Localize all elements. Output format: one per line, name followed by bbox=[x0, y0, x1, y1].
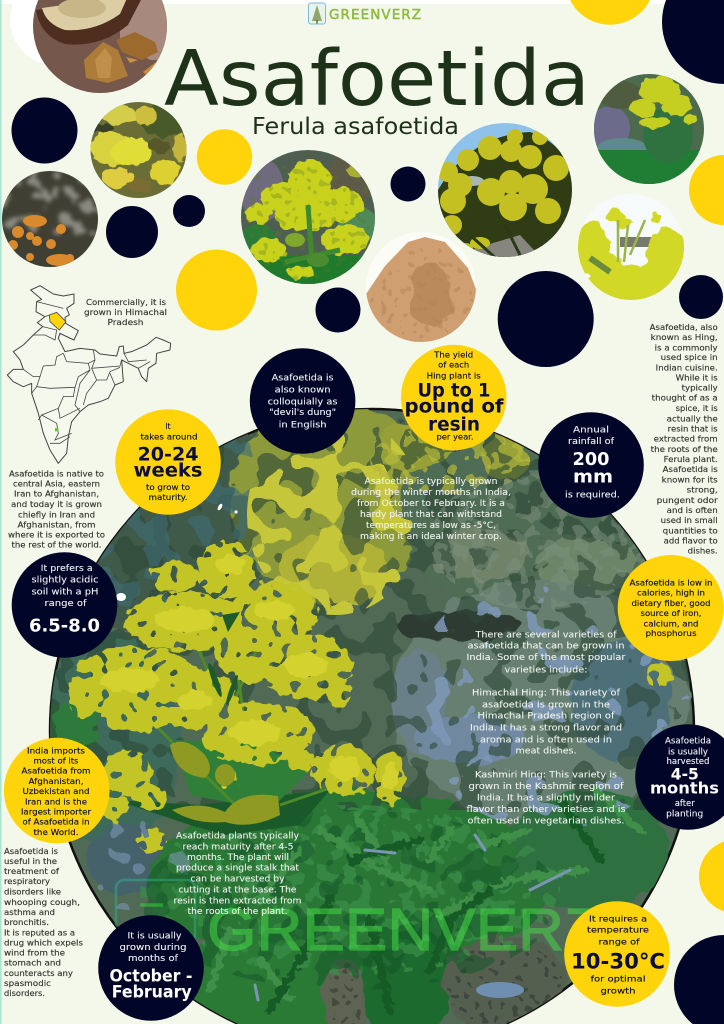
text: native range: Asafoetida is native to bbox=[9, 470, 104, 479]
callout: growing months bbox=[98, 915, 204, 1021]
callout: devil's dung: Asafoetida is bbox=[272, 374, 334, 384]
text: medicinal uses: It is reputed as a bbox=[4, 928, 75, 937]
text: varieties: India. It has a strong flavor and bbox=[470, 723, 622, 733]
text: varieties: asafoetida is grown in the bbox=[482, 700, 610, 710]
text: description, right column: extracted from bbox=[654, 435, 718, 444]
text: varieties: aroma and is often used in bbox=[480, 735, 612, 745]
text: varieties: India. It has a slightly milder bbox=[477, 794, 615, 804]
photo: flowering ferula plant bbox=[240, 150, 378, 290]
callout: devil's dung: "devil's dung" bbox=[269, 408, 336, 418]
callout: imports: Iran and is the bbox=[25, 797, 87, 806]
callout: nutrition: phosphorus bbox=[646, 629, 696, 638]
text: description, right column: spice, it is bbox=[676, 404, 718, 413]
text: varieties: varieties include: bbox=[504, 666, 588, 676]
background foliage texture bbox=[20, 390, 690, 1024]
small white speckles bbox=[116, 503, 238, 601]
callout: imports bbox=[4, 738, 110, 843]
text: medicinal uses: Asafoetida is bbox=[4, 847, 58, 856]
callout: temperature: It requires a bbox=[589, 914, 647, 923]
text: maturity and harvest: can be harvested by bbox=[190, 875, 285, 885]
text: medicinal uses: whooping cough, bbox=[4, 898, 80, 907]
callout: temperature bbox=[564, 901, 670, 1007]
callout: imports: India imports bbox=[27, 747, 85, 756]
yellow flower umbels bbox=[68, 542, 674, 853]
title: Asafoetida bbox=[164, 35, 590, 124]
text: varieties: meat dishes. bbox=[516, 747, 576, 757]
Himachal Pradesh highlight bbox=[49, 312, 66, 330]
text: winter growing season: Asafoetida is typically grown bbox=[364, 477, 498, 487]
photo: round yellow flower heads against sky bbox=[436, 120, 576, 262]
text: native range: Afghanistan, from bbox=[18, 520, 96, 529]
text: medicinal uses: wind from the bbox=[4, 949, 65, 958]
text: grown in Himachal Pradesh: Commercially, it is bbox=[86, 298, 166, 307]
callout: yield: per year. bbox=[436, 432, 474, 441]
text: description, right column: used spice in bbox=[661, 353, 718, 362]
photo: powdered asafoetida bbox=[366, 232, 476, 342]
callout: harvest time: planting bbox=[666, 810, 703, 820]
callout: temperature: for optimal bbox=[590, 975, 646, 984]
text: maturity and harvest: months. The plant will bbox=[187, 853, 289, 863]
text: varieties: India. Some of the most popular bbox=[466, 653, 626, 663]
subtitle: Ferula asafoetida bbox=[252, 112, 459, 140]
callout: harvest time: is usually bbox=[668, 747, 708, 757]
text: description, right column: actually the bbox=[667, 414, 718, 423]
text: maturity and harvest: produce a single stalk that bbox=[176, 864, 299, 874]
callout: temperature: growth bbox=[600, 986, 636, 995]
callout: yield bbox=[401, 345, 507, 450]
text: grown in Himachal Pradesh: Pradesh bbox=[108, 318, 144, 327]
text: varieties: grown in the Kashmir region of bbox=[468, 782, 624, 792]
callout: devil's dung: also known bbox=[275, 386, 331, 396]
India map bbox=[7, 286, 171, 463]
callout: imports: largest importer bbox=[21, 808, 92, 817]
callout: temperature: range of bbox=[598, 937, 640, 946]
callout: growing months: It is usually bbox=[128, 931, 182, 941]
text: varieties: asafoetida that can be grown in bbox=[468, 642, 624, 652]
text: winter growing season: hardy plant that can withstand bbox=[360, 510, 502, 520]
callout: yield: of each bbox=[438, 361, 469, 370]
callout: annual rainfall: mm bbox=[573, 466, 613, 487]
photo: orange flowers bbox=[0, 170, 100, 270]
text: maturity and harvest: the roots of the plant. bbox=[188, 907, 288, 917]
callout: imports: of Asafoetida in bbox=[22, 818, 90, 827]
blue-grey leaf strokes bbox=[255, 835, 570, 1000]
callout: imports: Uzbekistan and bbox=[22, 787, 90, 796]
text: description, right column: the roots of the bbox=[651, 445, 718, 454]
text: description, right column: and is often bbox=[667, 506, 718, 515]
text: description, right column: Indian cuisine. bbox=[656, 363, 718, 372]
callout: soil pH bbox=[12, 552, 117, 658]
text: description, right column: While it is bbox=[676, 373, 718, 382]
watermark logo bbox=[114, 878, 591, 952]
callout: harvest time: months bbox=[650, 778, 719, 797]
callout: nutrition: calcium, and bbox=[644, 619, 698, 628]
callout: soil pH: 6.5-8.0 bbox=[29, 616, 100, 637]
callout: yield: Up to 1 bbox=[418, 380, 490, 402]
callout: 20-24 weeks bbox=[115, 409, 221, 515]
callout: growing months: grown during bbox=[120, 943, 186, 953]
callout: yield: The yield bbox=[433, 351, 473, 360]
large circular illustration bbox=[20, 390, 694, 1024]
text: description, right column: Ferula plant. bbox=[664, 455, 718, 464]
logo bbox=[308, 3, 421, 24]
callout: nutrition: calories, high in bbox=[637, 589, 705, 598]
text: description, right column: pungent odor bbox=[657, 496, 719, 505]
callout: harvest time: Asafoetida bbox=[665, 737, 711, 747]
text: maturity and harvest: Asafoetida plants typically bbox=[176, 831, 300, 841]
callout: soil pH: soil with a pH bbox=[32, 587, 98, 597]
text: varieties: Himachal Pradesh region of bbox=[478, 712, 615, 722]
callout: imports: the World. bbox=[34, 828, 78, 837]
text: native range: where it is exported to bbox=[8, 531, 105, 540]
text: description, right column: add flavor to bbox=[664, 536, 718, 545]
text: medicinal uses: respiratory bbox=[4, 877, 50, 886]
callout: growing months: months of bbox=[128, 954, 179, 964]
callout: nutrition: dietary fiber, good bbox=[632, 599, 710, 608]
text: medicinal uses bbox=[4, 847, 83, 998]
text: medicinal uses: treatment of bbox=[4, 867, 59, 876]
text: native range: Iran to Afghanistan, bbox=[14, 490, 99, 499]
text: native range: and today it is grown bbox=[11, 500, 102, 509]
callout: imports: most of its bbox=[34, 757, 78, 766]
text: description, right column: typically bbox=[682, 384, 718, 393]
text: native range: the rest of the world. bbox=[12, 541, 102, 550]
text: description, right column: resin that is bbox=[668, 425, 718, 434]
text: varieties bbox=[466, 631, 626, 827]
text: medicinal uses: useful in the bbox=[4, 857, 57, 866]
text: medicinal uses: spasmodic bbox=[4, 979, 51, 988]
callout: imports: Afghanistan, bbox=[28, 777, 84, 786]
text: varieties: often used in vegetarian dishes. bbox=[468, 817, 624, 827]
text: description, right column: is a commonly bbox=[655, 343, 718, 352]
text: maturity and harvest: reach maturity after 4-5 bbox=[182, 842, 294, 852]
text: medicinal uses: disorders like bbox=[4, 887, 61, 896]
fern leaves and grass bbox=[210, 790, 640, 1010]
text: grown in Himachal Pradesh bbox=[84, 298, 167, 327]
callout: imports: Asafoetida from bbox=[22, 767, 91, 776]
text: description, right column: strong, bbox=[687, 486, 718, 495]
text: medicinal uses: counteracts any bbox=[4, 969, 73, 978]
callout: yield: pound of bbox=[404, 395, 504, 417]
photo: asafoetida powder bowl and resin bbox=[10, 0, 170, 95]
text: description, right column: Asafoetida is bbox=[663, 465, 718, 474]
text: description, right column: known as Hing, bbox=[651, 333, 718, 342]
callout: 20-24 weeks: 20-24 bbox=[138, 443, 198, 465]
callout: devil's dung bbox=[250, 348, 355, 454]
text: description, right column: thought of as a bbox=[652, 394, 718, 403]
callout: soil pH: range of bbox=[44, 599, 88, 609]
photo: yellow umbels against pale sky bbox=[578, 194, 684, 300]
text: varieties: Kashmiri Hing: This variety is bbox=[475, 770, 617, 780]
callout: annual rainfall: is required. bbox=[565, 491, 620, 501]
callout: annual rainfall bbox=[538, 412, 644, 518]
callout: growing months: February bbox=[112, 983, 192, 1003]
text: medicinal uses: drug which expels bbox=[4, 938, 83, 947]
text: medicinal uses: bronchitis. bbox=[4, 918, 49, 927]
patchy camouflage layers bbox=[50, 410, 690, 810]
callout: 20-24 weeks: takes around bbox=[140, 432, 198, 441]
text: varieties: flavor than other varieties and is bbox=[466, 805, 626, 815]
text: varieties: There are several varieties of bbox=[474, 631, 617, 641]
callout: harvest time bbox=[635, 724, 724, 830]
callout: devil's dung: in English bbox=[279, 420, 327, 430]
text: medicinal uses: asthma and bbox=[4, 908, 55, 917]
text: maturity and harvest: cutting it at the base. The bbox=[178, 885, 297, 895]
callout: yield: resin bbox=[428, 414, 480, 436]
callout: temperature: 10-30°C bbox=[571, 949, 665, 973]
text: winter growing season: during the winter months in India, bbox=[351, 488, 511, 498]
watermark logo: GREENVERZ bbox=[207, 897, 603, 963]
callout: annual rainfall: 200 bbox=[572, 449, 610, 470]
text: grown in Himachal Pradesh: grown in Himachal bbox=[84, 308, 167, 317]
callout: 20-24 weeks: It bbox=[166, 422, 170, 431]
text: winter growing season: temperatures as low as -5°C, bbox=[366, 521, 496, 531]
callout: nutrition: source of iron, bbox=[640, 609, 702, 618]
callout: 20-24 weeks: maturity. bbox=[148, 493, 188, 502]
text: description, right column: dishes. bbox=[688, 547, 718, 556]
text: maturity and harvest: resin is then extracted from bbox=[174, 896, 302, 906]
callout: nutrition: Asafoetida is low in bbox=[630, 579, 712, 588]
text: winter growing season: from October to February. It is a bbox=[357, 499, 505, 509]
callout: nutrition bbox=[618, 555, 724, 661]
callout: annual rainfall: rainfall of bbox=[568, 437, 615, 447]
olive leaf sheaths bbox=[170, 742, 280, 825]
stems and dark base under the flower bbox=[128, 650, 328, 835]
text: description, right column: known for its bbox=[662, 475, 718, 484]
text: winter growing season bbox=[351, 477, 511, 542]
text: native range: chiefly in Iran and bbox=[18, 510, 95, 519]
callout: harvest time: after bbox=[675, 799, 695, 809]
text: description, right column bbox=[650, 323, 719, 556]
callout: temperature: temperature bbox=[587, 926, 649, 935]
text: native range: central Asia, eastern bbox=[13, 480, 100, 489]
logo: GREENVERZ bbox=[329, 7, 421, 23]
text: varieties: Himachal Hing: This variety of bbox=[472, 689, 621, 699]
callout: harvest time: harvested bbox=[666, 757, 710, 767]
callout: devil's dung: colloquially as bbox=[268, 397, 338, 407]
callout: soil pH: slightly acidic bbox=[32, 576, 99, 586]
callout: yield: Hing plant is bbox=[427, 371, 481, 380]
callout: soil pH: It prefers a bbox=[41, 564, 93, 574]
photo: yellow flower heads close-up bbox=[90, 100, 190, 200]
text: maturity and harvest bbox=[174, 831, 302, 917]
text: description, right column: Asafoetida, also bbox=[650, 323, 718, 332]
callout: annual rainfall: Annual bbox=[573, 425, 609, 435]
callout: 20-24 weeks: to grow to bbox=[146, 483, 190, 492]
text: medicinal uses: disorders. bbox=[4, 989, 45, 998]
text: description, right column: quantities to bbox=[663, 526, 718, 535]
callout: 20-24 weeks: weeks bbox=[134, 460, 202, 482]
text: description, right column: used in small bbox=[661, 516, 718, 525]
callout: harvest time: 4-5 bbox=[671, 764, 699, 783]
text: winter growing season: making it an ideal winter crop. bbox=[360, 532, 502, 542]
flower shadow spots bbox=[206, 612, 240, 706]
callout: growing months: October - bbox=[110, 967, 192, 987]
text: native range bbox=[8, 470, 105, 550]
photo: ferula in landscape bbox=[594, 74, 704, 184]
text: medicinal uses: stomach and bbox=[4, 959, 61, 968]
